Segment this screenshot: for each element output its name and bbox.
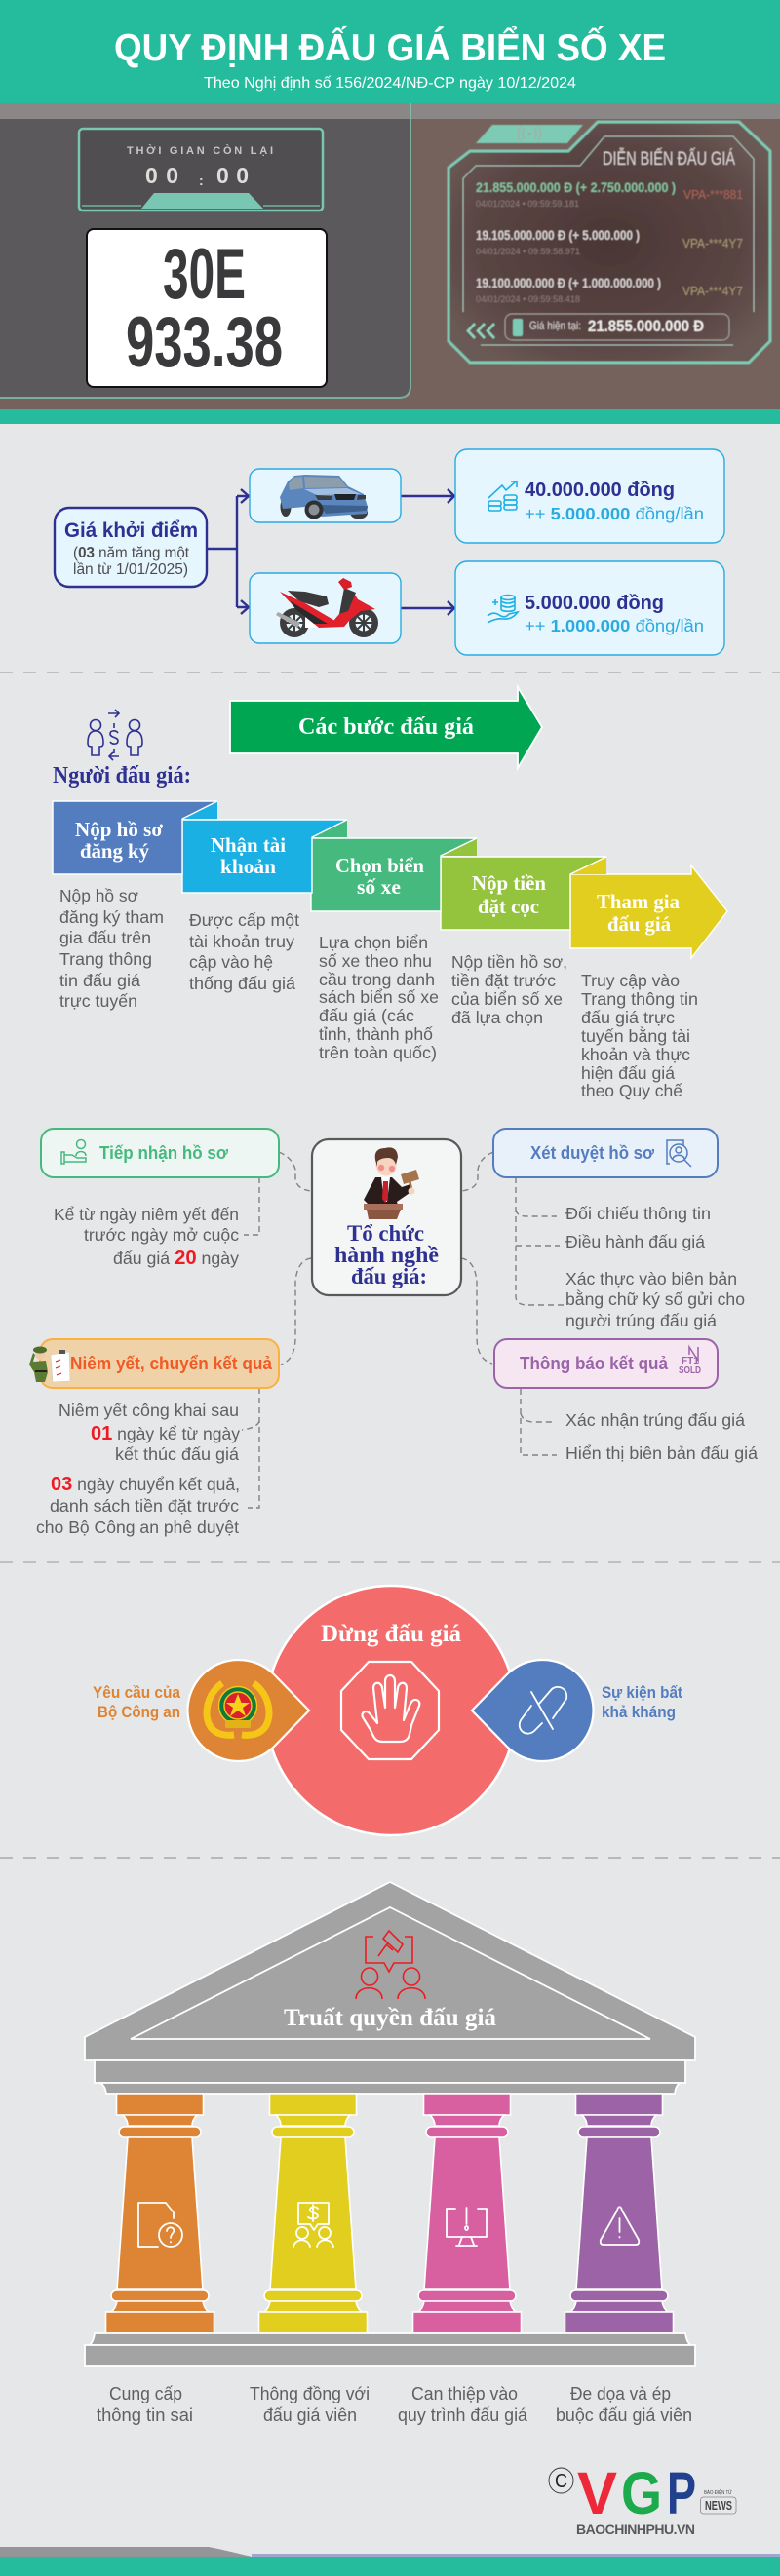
box: motorbike (250, 573, 401, 643)
text: step 5: Truy cập vào (581, 971, 680, 990)
logo: VGP news: NEWS (705, 2498, 732, 2513)
icon: search document (667, 1140, 691, 1167)
text: step 1 (59, 886, 164, 1011)
roof (85, 1882, 695, 2094)
logo: VGP news: G (621, 2460, 662, 2526)
box: organiser: Tổ chức (347, 1221, 424, 1246)
text: step 3: tỉnh, thành phố (319, 1024, 433, 1044)
text: step 1: gia đấu trên (59, 928, 151, 947)
text: announce details (566, 1410, 758, 1463)
box: starting price label: (03 năm tăng một (73, 545, 190, 561)
caption: interference: quy trình đấu giá (398, 2405, 528, 2425)
step 4 (441, 857, 606, 930)
licence plate: 933.38 (126, 303, 283, 382)
label: public security request (93, 1683, 180, 1721)
text: step 5: theo Quy chế (581, 1081, 682, 1100)
text: publish details: 03 ngày chuyển kết quả, (51, 1474, 240, 1495)
panel: auction progress: 04/01/2024 • 09:59:58.418 (476, 294, 580, 305)
box: organiser (312, 1139, 461, 1295)
heading: bidders: Người đấu giá: (53, 763, 191, 788)
text: step 5: khoản và thực (581, 1045, 690, 1064)
caption: threats: buộc đấu giá viên (556, 2405, 692, 2425)
panel: auction progress: 21.855.000.000 Đ (+ 2.750.000.000 ) (476, 179, 676, 195)
panel: disqualification temple (85, 1882, 695, 2425)
text: step 1: đăng ký tham (59, 907, 164, 927)
step 4: Nộp tiền (472, 871, 546, 895)
icon: rising coins (488, 481, 517, 511)
icon: sold: FT1 (682, 1356, 699, 1366)
caption: threats (556, 2384, 692, 2425)
step 5: đấu giá (607, 912, 671, 936)
icon: dollar talk (293, 2203, 333, 2247)
box: review application (493, 1129, 718, 1177)
icon: hand with coins (488, 595, 518, 623)
box: motorbike price: 5.000.000 đồng (525, 593, 664, 614)
text: review details: bằng chữ ký số gửi cho (566, 1288, 745, 1309)
text: publish details: Niêm yết công khai sau (58, 1401, 239, 1420)
step 2: Nhận tài (211, 833, 286, 857)
text: step 4: của biển số xe (451, 989, 563, 1009)
panel: countdown timer: 00 (216, 163, 249, 188)
licence plate (87, 229, 327, 387)
text: step 3: trên toàn quốc) (319, 1043, 437, 1062)
panel: auction progress: VPA-***4Y7 (682, 284, 743, 298)
box: organiser: đấu giá: (351, 1264, 427, 1288)
connectors (207, 489, 454, 615)
panel: starting price (55, 449, 724, 655)
subtitle: Theo Nghị định số 156/2024/NĐ-CP ngày 10/12/2024 (204, 75, 576, 92)
text: publish details (36, 1401, 240, 1537)
box: receive application (41, 1129, 279, 1177)
step 1 (53, 801, 217, 874)
footer band (0, 2547, 780, 2576)
text: review details: người trúng đấu giá (566, 1311, 717, 1330)
box: car price: 40.000.000 đồng (525, 480, 675, 501)
panel: stop auction (93, 1586, 682, 1835)
icon: motorbike (276, 578, 378, 637)
icon: car (280, 475, 368, 519)
text: publish details: cho Bộ Công an phê duyệt (36, 1518, 239, 1537)
icon: officer with clipboard (29, 1347, 70, 1382)
step 3 (311, 838, 477, 911)
icon: warning triangle (601, 2207, 639, 2245)
caption: threats: Đe dọa và ép (570, 2384, 671, 2403)
text: step 4 (451, 952, 567, 1027)
icon: document question (138, 2203, 182, 2247)
icon: bidders (88, 710, 142, 760)
text: step 5 (581, 971, 698, 1100)
text: review details: Đối chiếu thông tin (566, 1204, 711, 1223)
pillar: collusion (259, 2094, 367, 2333)
text: step 1: Nộp hồ sơ (59, 886, 138, 905)
box: announce results: Thông báo kết quả (520, 1353, 669, 1373)
panel: countdown timer (79, 129, 323, 211)
caption: interference (398, 2384, 528, 2425)
licence plate: 30E (163, 235, 246, 314)
text: announce details: Xác nhận trúng đấu giá (566, 1410, 745, 1430)
text: step 3: Lựa chọn biển (319, 933, 428, 952)
panel: auction screen image (0, 103, 780, 409)
text: step 3: cầu trong danh (319, 970, 435, 989)
caption: interference: Can thiệp vào (411, 2384, 518, 2403)
step 5: Tham gia (597, 890, 680, 913)
step 1: Nộp hồ sơ (75, 818, 163, 841)
panel: auction progress: 04/01/2024 • 09:59:59.181 (476, 199, 579, 210)
box: motorbike price: ++ 1.000.000 đồng/lần (525, 616, 704, 635)
box: organiser: hành nghề (334, 1243, 439, 1267)
panel: auction progress: VPA-***4Y7 (682, 236, 743, 250)
box: announce results (494, 1339, 718, 1388)
text: step 2: thống đấu giá (189, 974, 295, 993)
panel: auction progress: 19.100.000.000 Đ (+ 1.000.000.000 ) (476, 275, 661, 290)
step 5 (570, 865, 727, 958)
text: step 2 (189, 910, 299, 993)
box: publish results (29, 1339, 279, 1388)
text: receive details: trước ngày mở cuộc (84, 1225, 239, 1245)
step 4: đặt cọc (478, 895, 539, 918)
box: car price (455, 449, 724, 543)
panel: countdown timer: : (199, 173, 204, 188)
icon: receiving hand (61, 1140, 86, 1164)
box: starting price label: Giá khởi điểm (64, 519, 198, 542)
icon: stop hand (341, 1662, 439, 1759)
text: step 1: trực tuyến (59, 991, 137, 1011)
arrow: auction steps heading (230, 687, 542, 768)
label: force majeure: khả kháng (602, 1703, 676, 1721)
arrow: auction steps heading: Các bước đấu giá (298, 714, 474, 740)
panel: auction progress: 21.855.000.000 Đ (588, 317, 704, 335)
panel: countdown timer: 00 (145, 163, 178, 188)
text: step 1: Trang thông (59, 949, 152, 969)
drop: public security request (187, 1660, 309, 1761)
logo: VGP news: C (555, 2471, 567, 2492)
roof: Truất quyền đấu giá (284, 2005, 496, 2031)
step 3: số xe (357, 875, 401, 899)
text: step 3 (319, 933, 439, 1062)
panel: auction progress: VPA-***881 (683, 187, 743, 202)
circle: stop auction: Dừng đấu giá (321, 1621, 461, 1647)
text: step 3: số xe theo nhu (319, 951, 432, 971)
text: receive details (54, 1205, 239, 1269)
text: step 5: tuyến bằng tài (581, 1025, 690, 1046)
box: publish results: Niêm yết, chuyển kết quả (70, 1353, 273, 1373)
step 2: khoản (220, 855, 276, 878)
text: step 2: Được cấp một (189, 910, 299, 930)
text: step 4: tiền đặt trước (451, 971, 556, 990)
label: force majeure (602, 1683, 682, 1721)
panel: auction progress: DIỄN BIẾN ĐẤU GIÁ (603, 148, 735, 170)
logo: VGP news: BÁO ĐIỆN TỬ (704, 2488, 733, 2496)
text: step 5: hiện đấu giá (581, 1063, 675, 1083)
text: review details: Xác thực vào biên bản (566, 1269, 737, 1288)
text: publish details: danh sách tiền đặt trước (50, 1496, 239, 1516)
label: public security request: Bộ Công an (98, 1703, 180, 1721)
icon: monitor alert (447, 2208, 487, 2246)
text: announce details: Hiển thị biên bản đấu giá (566, 1443, 758, 1463)
logo: VGP news: P (667, 2460, 696, 2526)
logo: VGP news: V (577, 2460, 617, 2526)
panel: auction steps (53, 687, 727, 1100)
caption: collusion: Thông đồng với (250, 2384, 370, 2403)
box: starting price label (55, 508, 207, 587)
text: step 4: đã lựa chọn (451, 1008, 543, 1027)
label: public security request: Yêu cầu của (93, 1683, 180, 1702)
text: receive details: Kể từ ngày niêm yết đến (54, 1205, 239, 1224)
dashed connectors (242, 1152, 567, 1508)
text: step 1: tin đấu giá (59, 971, 140, 990)
icon: police emblem (207, 1683, 269, 1735)
header band (0, 0, 780, 103)
step 3: Chọn biển (335, 854, 424, 877)
icon: auctioneer (364, 1147, 419, 1219)
drop: force majeure (472, 1660, 594, 1761)
text: step 2: tài khoản truy (189, 932, 294, 951)
caption: collusion: đấu giá viên (263, 2405, 357, 2425)
logo: VGP news (549, 2460, 736, 2537)
panel: auction progress: 04/01/2024 • 09:59:58.971 (476, 247, 580, 257)
box: motorbike price (455, 561, 724, 655)
box: car price: ++ 5.000.000 đồng/lần (525, 504, 704, 523)
step 1: đăng ký (80, 839, 149, 863)
box: review application: Xét duyệt hồ sơ (530, 1142, 655, 1163)
green strip under image (0, 409, 780, 424)
box: starting price label: lần từ 1/01/2025) (73, 561, 188, 578)
caption: collusion (250, 2384, 370, 2425)
text: review details: Điều hành đấu giá (566, 1232, 705, 1251)
text: step 3: sách biển số xe (319, 987, 439, 1007)
box: car (250, 469, 401, 522)
text: publish details: 01 ngày kể từ ngày (91, 1423, 240, 1444)
label: force majeure: Sự kiện bất (602, 1683, 682, 1702)
text: step 3: đấu giá (các (319, 1006, 414, 1025)
text: step 2: cập vào hệ (189, 952, 273, 972)
caption: false information: thông tin sai (97, 2405, 193, 2425)
panel: auction progress: Giá hiện tại: (529, 319, 581, 332)
text: receive details: đấu giá 20 ngày (113, 1248, 239, 1269)
panel: auction progress: 19.105.000.000 Đ (+ 5.000.000 ) (476, 227, 640, 243)
panel: countdown timer: THỜI GIAN CÒN LẠI (127, 144, 273, 157)
text: review details (566, 1204, 745, 1330)
caption: false information (97, 2384, 193, 2425)
text: step 5: Trang thông tin (581, 989, 698, 1009)
text: publish details: kết thúc đấu giá (115, 1444, 239, 1464)
icon: broken link (520, 1687, 566, 1734)
icon: sold (679, 1347, 701, 1376)
box: receive application: Tiếp nhận hồ sơ (99, 1142, 229, 1163)
panel: auction progress (448, 122, 770, 363)
temple base (85, 2333, 695, 2366)
icon: sold: SOLD (679, 1365, 701, 1376)
title: QUY ĐỊNH ĐẤU GIÁ BIỂN SỐ XE (114, 25, 666, 69)
pillar: threats (566, 2094, 673, 2333)
pillar: interference (413, 2094, 521, 2333)
panel: auction organisation (29, 1129, 758, 1537)
circle: stop auction (266, 1586, 516, 1835)
text: step 5: đấu giá trực (581, 1008, 675, 1027)
logo: VGP news: BAOCHINHPHU.VN (576, 2521, 695, 2537)
icon: gavel and people (356, 1931, 425, 1999)
step 2 (182, 820, 347, 893)
text: step 4: Nộp tiền hồ sơ, (451, 952, 567, 972)
pillar: false information (105, 2094, 214, 2333)
caption: false information: Cung cấp (109, 2384, 182, 2403)
